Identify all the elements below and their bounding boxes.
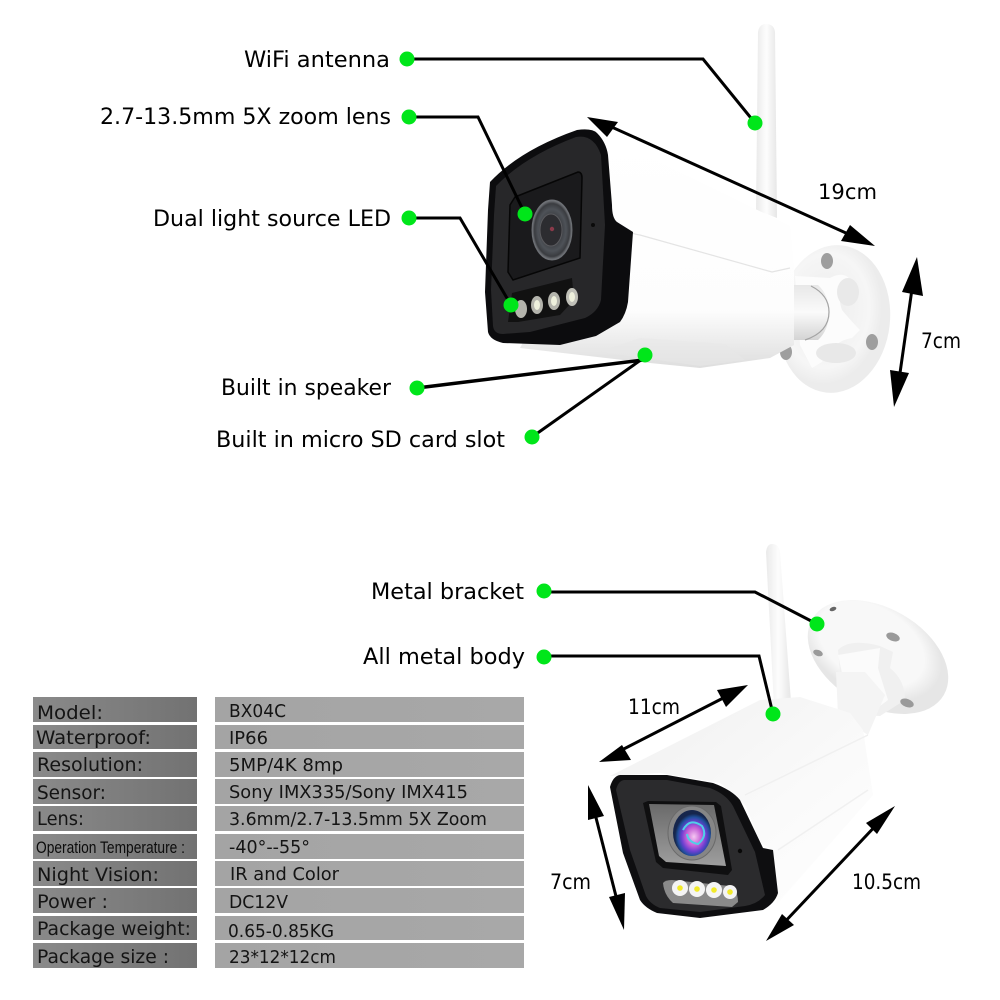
label: SD card: Built in micro SD card slot [216, 428, 505, 453]
row: power [33, 888, 524, 913]
row: resolution: Resolution: [37, 754, 143, 776]
row: resolution: 5MP/4K 8mp [229, 756, 343, 776]
row: waterproof: Waterproof: [36, 727, 151, 749]
wall bracket [771, 240, 897, 398]
label: WiFi antenna: WiFi antenna [244, 48, 390, 73]
camera photo: bottom view [610, 544, 968, 918]
black front housing [485, 129, 633, 345]
row: power: DC12V [229, 893, 288, 913]
microphone hole [738, 849, 742, 853]
leader line: LED [412, 218, 511, 305]
lens [668, 806, 716, 860]
label: zoom lens: 2.7-13.5mm 5X zoom lens [100, 105, 391, 130]
microphone hole [591, 223, 595, 227]
black front housing [610, 775, 778, 918]
dimension arrow: 10.5cm [766, 806, 895, 941]
row: lens: Lens: [37, 808, 84, 830]
leader line: metal body [548, 656, 773, 714]
row: operation temperature [33, 834, 524, 859]
camera body [610, 697, 873, 904]
metal bracket plate [788, 577, 968, 737]
dimension arrow: bottom 7cm [588, 785, 625, 930]
dimension arrow: 19cm [587, 117, 875, 246]
lens panel [643, 801, 732, 875]
row: package size [33, 943, 524, 968]
row: lens: 3.6mm/2.7-13.5mm 5X Zoom [229, 810, 487, 830]
row: sensor: Sensor: [37, 782, 106, 804]
lens panel [508, 172, 582, 280]
row: waterproof [33, 725, 524, 749]
dimension arrow: 11cm [599, 685, 748, 762]
row: sensor [33, 779, 524, 804]
lens panel face [649, 804, 726, 866]
row: package weight: 0.65-0.85KG [228, 922, 334, 942]
row: power: Power : [37, 891, 108, 913]
row: model: Model: [37, 702, 103, 724]
dimension arrow: top 7cm [890, 257, 923, 407]
leader line: SD card [532, 357, 645, 437]
label: 10.5cm: 10.5cm [852, 870, 921, 894]
row: package weight [33, 916, 524, 942]
row: package size: Package size : [37, 946, 169, 968]
label: metal bracket: Metal bracket [371, 580, 524, 605]
row: package size: 23*12*12cm [229, 948, 336, 968]
callout markers [400, 52, 824, 722]
camera photo: top view [485, 24, 897, 398]
inner face of front housing [491, 137, 605, 334]
row: model [33, 697, 524, 724]
row: resolution [33, 752, 524, 777]
leader line: metal bracket [548, 592, 817, 624]
row: sensor: Sony IMX335/Sony IMX415 [229, 783, 468, 803]
LED strip [508, 278, 578, 322]
leader line: speaker [417, 360, 643, 388]
antenna [756, 24, 777, 218]
LED strip [663, 880, 738, 907]
antenna [766, 544, 791, 706]
row: waterproof: IP66 [229, 729, 268, 749]
leader line: WiFi antenna [412, 59, 755, 123]
label: 11cm: 11cm [628, 695, 680, 719]
row: night vision [33, 861, 524, 886]
label: top 7cm: 7cm [921, 329, 961, 353]
row: night vision: IR and Color [230, 865, 340, 885]
row: night vision: Night Vision: [37, 864, 159, 886]
row: operation temperature: Operation Temperature : [36, 838, 185, 857]
label: bottom 7cm: 7cm [550, 870, 591, 894]
lens [532, 200, 572, 260]
label: 19cm: 19cm [818, 180, 877, 204]
label: LED: Dual light source LED [153, 207, 391, 232]
specification table [33, 697, 524, 968]
leader line: zoom lens [412, 117, 525, 214]
row: package weight: Package weight: [37, 918, 191, 940]
label: metal body: All metal body [363, 645, 525, 670]
label: speaker: Built in speaker [221, 376, 392, 401]
row: lens [33, 806, 524, 831]
inner face of front housing [616, 780, 765, 912]
row: model: BX04C [229, 702, 286, 722]
camera body [520, 136, 794, 368]
row: operation temperature: -40°--55° [229, 838, 310, 858]
